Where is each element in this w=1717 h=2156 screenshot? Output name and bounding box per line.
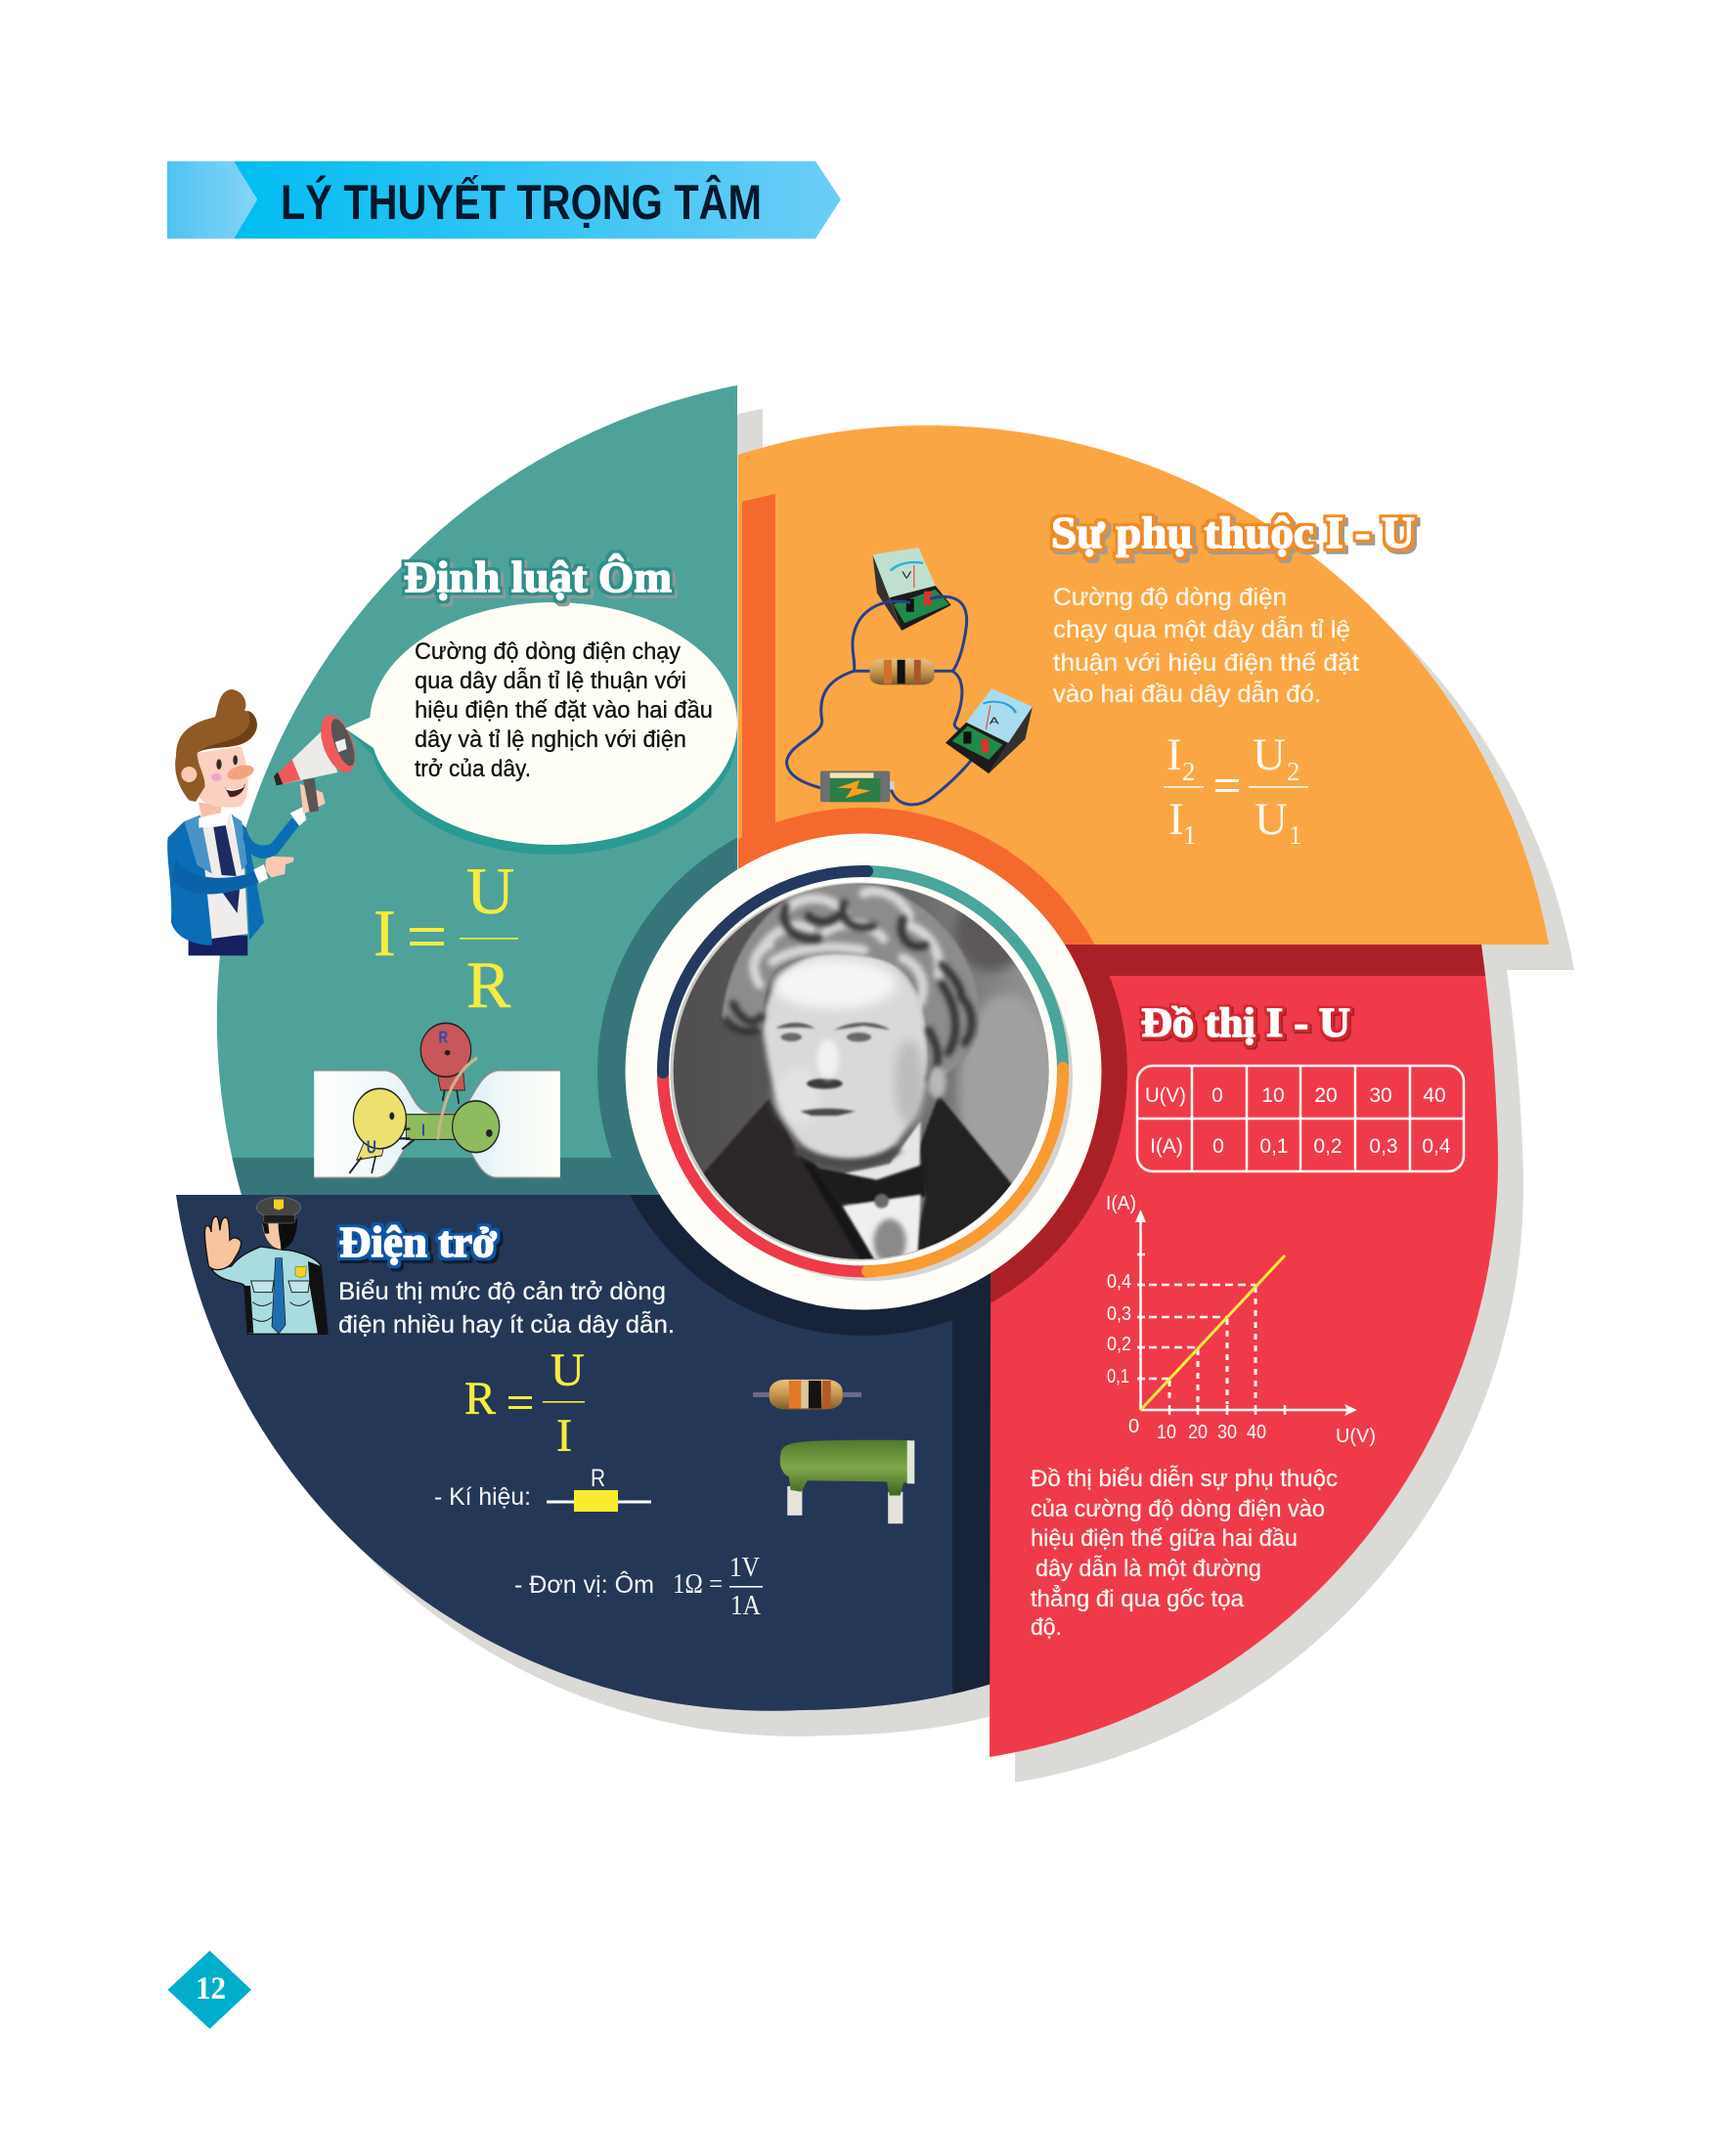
banner: section title [167, 161, 841, 239]
line chart: I against U [1106, 1193, 1376, 1447]
line chart: I against U: 0,1 [1107, 1366, 1129, 1387]
table: U and I values: 0 [1212, 1135, 1224, 1158]
text: resistance definition: Biểu thị mức độ cản trở dòng [338, 1278, 666, 1305]
table: U and I values: 20 [1314, 1084, 1338, 1107]
character: policeman signalling stop [204, 1197, 329, 1334]
text and formula: unit of resistance: 1Ω = [673, 1569, 723, 1600]
illustration: circuit with voltmeter, ammeter, resistor and battery [787, 548, 1033, 805]
text: graph explanation [1031, 1466, 1338, 1641]
text: graph explanation: Đồ thị biểu diễn sự phụ thuộc [1031, 1466, 1338, 1492]
formula: I2/I1 = U2/U1: 2 [1287, 757, 1300, 786]
text and formula: unit of resistance [514, 1553, 763, 1621]
text: I-U dependency statement [1053, 584, 1359, 708]
text: I-U dependency statement: thuận với hiệu điện thế đặt [1053, 649, 1359, 677]
illustration: U, I, R characters at a wire narrowing: U [367, 1137, 376, 1158]
formula: I2/I1 = U2/U1: 1 [1289, 820, 1302, 850]
speech bubble: Ohm's law statement: qua dây dẫn tỉ lệ thuận với [415, 668, 686, 694]
line chart: I against U: 0,2 [1107, 1334, 1131, 1355]
resistor [869, 659, 934, 684]
table: U and I values: 0,3 [1369, 1135, 1398, 1158]
speech bubble: Ohm's law statement: Cường độ dòng điện chạy [415, 638, 681, 665]
text: graph explanation: độ. [1031, 1614, 1062, 1641]
photo: axial resistor [753, 1380, 861, 1410]
speech bubble: Ohm's law statement: dây và tỉ lệ nghịch với điện [415, 726, 686, 753]
text: I-U dependency statement: Cường độ dòng điện [1053, 584, 1287, 611]
line chart: I against U: 20 [1188, 1422, 1208, 1443]
banner: section title: LÝ THUYẾT TRỌNG TÂM [281, 175, 762, 230]
table: U and I values: 0 [1211, 1084, 1223, 1107]
text: graph explanation: dây dẫn là một đường [1035, 1556, 1261, 1582]
heading: Điện trở: Điện trở [339, 1218, 498, 1266]
illustration: U, I, R characters at a wire narrowing: R [439, 1029, 448, 1047]
text and icon: resistor symbol [434, 1465, 651, 1512]
heading: Đồ thị I - U: Đồ thị I - U [1141, 1001, 1350, 1046]
voltmeter: V [902, 570, 912, 581]
ammeter [946, 688, 1033, 773]
panel: Sự phụ thuộc I - U (orange) [738, 425, 1549, 945]
table: U and I values: I(A) [1150, 1135, 1183, 1158]
line chart: I against U: 40 [1247, 1422, 1266, 1443]
table: U and I values: 0,4 [1422, 1135, 1451, 1158]
heading: Sự phụ thuộc I - U: Sự phụ thuộc I - U [1051, 507, 1415, 557]
formula: I2/I1 = U2/U1: U [1255, 794, 1288, 845]
line chart: I against U: 0,3 [1107, 1303, 1131, 1325]
formula: R = U / I: I [556, 1410, 572, 1462]
text and icon: resistor symbol: R [591, 1465, 605, 1492]
text: graph explanation: hiệu điện thế giữa hai đầu [1031, 1525, 1298, 1552]
panel: Đồ thị I - U (red) [990, 945, 1498, 1757]
formula: I = U / R [374, 854, 518, 1022]
text: I-U dependency statement: chạy qua một dây dẫn tỉ lệ [1053, 615, 1350, 643]
page number badge: 12 [196, 1971, 226, 2006]
formula: R = U / I: R [464, 1373, 496, 1425]
line chart: I against U: U(V) [1336, 1426, 1376, 1447]
voltmeter [872, 548, 951, 631]
formula: I2/I1 = U2/U1: 1 [1183, 820, 1197, 850]
panel: Định luật Ôm (teal) [217, 385, 737, 1195]
speech bubble: Ohm's law statement: hiệu điện thế đặt vào hai đầu [415, 697, 713, 724]
speech bubble: Ohm's law statement: trở của dây. [415, 756, 531, 782]
formula: I = U / R: I [374, 896, 396, 970]
line chart: I against U: 0,4 [1107, 1271, 1131, 1293]
page number badge [168, 1951, 251, 2029]
grey drop shadows of the four sectors [201, 409, 1574, 1782]
formula: I = U / R: R [466, 947, 511, 1022]
formula: I2/I1 = U2/U1: U [1253, 729, 1286, 780]
table: U and I values: 0,1 [1259, 1135, 1289, 1158]
table: U and I values: 0,2 [1313, 1135, 1343, 1158]
text and formula: unit of resistance: 1V [729, 1553, 760, 1583]
ring segments [663, 871, 1063, 1271]
portrait of Georg Ohm [673, 884, 1049, 1259]
formula: R = U / I [464, 1344, 585, 1462]
text and formula: unit of resistance: 1A [730, 1591, 762, 1621]
wires [787, 596, 983, 805]
table: U and I values [1137, 1066, 1464, 1171]
speech bubble: Ohm's law statement [345, 602, 737, 855]
line chart: I against U: I(A) [1106, 1193, 1136, 1214]
table: U and I values: 10 [1261, 1084, 1285, 1107]
formula: I = U / R: U [466, 854, 514, 928]
character: man with megaphone [167, 689, 362, 955]
formula: I2/I1 = U2/U1: I [1167, 729, 1182, 780]
table: U and I values: U(V) [1145, 1084, 1186, 1107]
photo: wirewound resistor [780, 1440, 914, 1523]
illustration: U, I, R characters at a wire narrowing [314, 1023, 560, 1177]
panel: Điện trở (navy) [176, 1195, 991, 1711]
central medallion: portrait with coloured ring [626, 833, 1101, 1310]
text and icon: resistor symbol: - Kí hiệu: [434, 1483, 531, 1511]
formula: I2/I1 = U2/U1: I [1168, 794, 1184, 845]
text and formula: unit of resistance: - Đơn vị: Ôm [514, 1570, 654, 1599]
battery [820, 770, 895, 802]
text: resistance definition: điện nhiều hay ít của dây dẫn. [338, 1310, 675, 1339]
text: graph explanation: của cường độ dòng điện vào [1031, 1496, 1325, 1522]
line chart: I against U: 10 [1157, 1422, 1176, 1443]
infographic canvas [167, 161, 1574, 2029]
table: U and I values: 30 [1369, 1084, 1392, 1107]
text: graph explanation: thẳng đi qua gốc tọa [1031, 1584, 1245, 1612]
line chart: I against U: 0 [1128, 1416, 1139, 1437]
text: I-U dependency statement: vào hai đầu dây dẫn đó. [1053, 680, 1321, 708]
features [775, 1023, 890, 1116]
line chart: I against U: 30 [1217, 1422, 1237, 1443]
formula: I2/I1 = U2/U1 [1164, 729, 1308, 850]
text: resistance definition [338, 1278, 675, 1339]
formula: I2/I1 = U2/U1: 2 [1182, 757, 1195, 786]
heading: Định luật Ôm: Định luật Ôm [404, 553, 672, 601]
ammeter: A [990, 716, 999, 726]
table: U and I values: 40 [1423, 1084, 1446, 1107]
illustration: U, I, R characters at a wire narrowing: I [421, 1122, 425, 1140]
formula: R = U / I: U [550, 1344, 585, 1396]
hair [722, 882, 979, 1082]
